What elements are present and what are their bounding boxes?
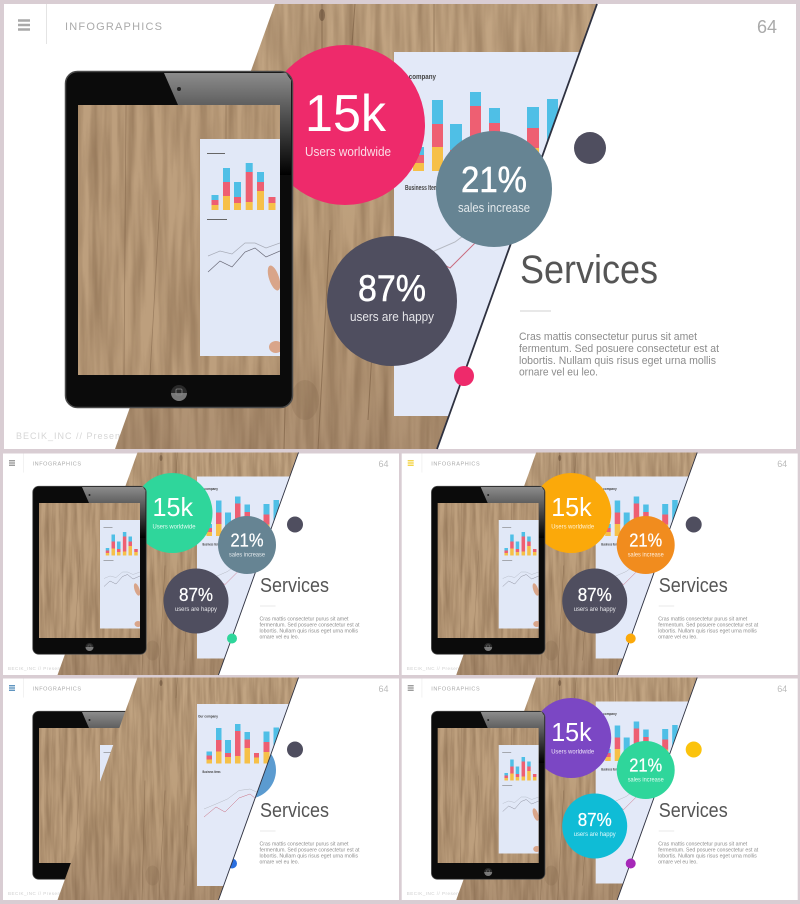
stat circle: 15k: 15k (305, 85, 387, 143)
heading: services: Services (260, 575, 329, 597)
wood photo with chart paper (100, 0, 610, 452)
body text (260, 842, 360, 865)
stat circle: 15k: Users worldwide (305, 144, 391, 159)
stat circle: 87% (327, 236, 457, 366)
body text: Cras mattis consectetur purus sit amet (260, 842, 349, 848)
heading: infographics: INFOGRAPHICS (65, 21, 162, 33)
accent dot: purple (626, 858, 636, 868)
accent dot: dark (287, 516, 303, 532)
accent dot: pink (454, 366, 474, 386)
panel: blue theme slide, wood wipe over content (3, 676, 399, 902)
heading: services: Services (659, 800, 728, 822)
body text: ornare vel eu leo. (260, 634, 299, 640)
body text: Cras mattis consectetur purus sit amet (658, 616, 748, 622)
footer credit: BECIK_INC // Presentation (8, 666, 75, 671)
stat circle: partly hidden blue (218, 741, 276, 799)
stat circle: 21%: sales increase (229, 552, 265, 558)
page number: 64 (777, 684, 787, 694)
panel: orange theme slide (402, 450, 798, 676)
wood photo with chart paper (50, 676, 305, 902)
heading: services: Services (520, 248, 658, 292)
stat circle: 21%: 21% (461, 159, 527, 200)
heading: infographics: INFOGRAPHICS (32, 686, 81, 692)
stat circle: 21% (218, 516, 276, 574)
stat circle: 15k (531, 473, 611, 553)
icon: menu (18, 20, 30, 30)
body text (658, 842, 759, 865)
stat circle: 15k: Users worldwide (551, 748, 595, 756)
stat circle: 87%: 87% (179, 584, 213, 605)
stat circle: 87%: users are happy (350, 309, 434, 324)
body text: fermentum. Sed posuere consectetur est at (658, 848, 759, 854)
stat circle: 21%: sales increase (628, 776, 664, 784)
body text: lobortis. Nullam quis risus eget urna mollis (658, 628, 757, 634)
stat circle: 87%: 87% (578, 584, 612, 605)
body text: ornare vel eu leo. (658, 859, 698, 865)
wood photo with chart paper (449, 676, 704, 902)
stat circle: 15k: 15k (551, 717, 593, 747)
icon: menu (408, 461, 414, 465)
body text: lobortis. Nullam quis risus eget urna mollis (519, 355, 716, 367)
body text: fermentum. Sed posuere consectetur est at (658, 622, 759, 628)
wood photo with chart paper (449, 450, 704, 676)
stat circle: 21%: 21% (629, 756, 662, 776)
heading: infographics: INFOGRAPHICS (431, 462, 480, 468)
body text: Cras mattis consectetur purus sit amet (260, 616, 349, 622)
body text: ornare vel eu leo. (260, 859, 299, 865)
stat circle: 87% (164, 568, 228, 634)
accent dot: amber (626, 634, 636, 644)
footer credit: BECIK_INC // Presentation (407, 666, 473, 671)
stat circle: 21%: sales increase (458, 201, 530, 215)
slanted divider line (617, 452, 697, 675)
stat circle: 87%: users are happy (574, 606, 616, 613)
icon: menu (9, 686, 15, 690)
accent dot: dark (287, 742, 303, 758)
accent dot: blue (227, 858, 237, 868)
stat circle: 15k: Users worldwide (551, 524, 595, 530)
page number: 64 (378, 459, 388, 469)
icon: tablet (431, 711, 545, 879)
body text: fermentum. Sed posuere consectetur est at (260, 848, 360, 854)
body text (260, 616, 360, 640)
body text: fermentum. Sed posuere consectetur est at (260, 622, 360, 628)
stat circle: 87%: users are happy (574, 831, 616, 838)
accent dot: green (227, 634, 237, 644)
body text: Cras mattis consectetur purus sit amet (519, 331, 697, 343)
stat circle: 87% (562, 794, 627, 858)
stat circle: 21%: 21% (230, 530, 264, 550)
stat circle: 15k: 15k (152, 492, 194, 522)
body text (658, 616, 759, 640)
accent dot: dark (574, 132, 606, 164)
stat circle: 87% (562, 568, 627, 634)
slanted divider line (218, 452, 298, 675)
icon: tablet (33, 486, 146, 654)
slanted divider line (617, 678, 697, 900)
footer credit: BECIK_INC // Presentation (407, 891, 473, 896)
slanted divider line (218, 678, 298, 900)
heading: infographics: INFOGRAPHICS (431, 686, 480, 692)
body text: lobortis. Nullam quis risus eget urna mollis (658, 854, 757, 860)
body text: Cras mattis consectetur purus sit amet (658, 842, 748, 848)
stat circle: 15k: Users worldwide (152, 524, 196, 530)
accent dot: dark (686, 516, 702, 532)
body text: ornare vel eu leo. (658, 634, 698, 640)
stat circle: 21% (617, 741, 675, 799)
stat circle: 87%: 87% (358, 268, 426, 309)
stat circle: 15k: 15k (551, 492, 593, 522)
footer credit: BECIK_INC // Presentation (16, 431, 149, 441)
body text: fermentum. Sed posuere consectetur est at (519, 343, 719, 355)
body text (519, 331, 719, 378)
icon: tablet (33, 711, 146, 879)
stat circle: 15k (531, 698, 611, 778)
stat circle: 87%: users are happy (175, 606, 218, 613)
wood photo with chart paper (50, 450, 305, 676)
icon: tablet (431, 486, 545, 654)
stat circle: 87%: 87% (578, 809, 612, 830)
stat circle: 21%: 21% (629, 530, 662, 550)
panel: main slide, pink theme (4, 0, 796, 452)
page number: 64 (757, 17, 777, 37)
slanted divider line (437, 4, 597, 449)
body text: lobortis. Nullam quis risus eget urna mollis (260, 854, 358, 860)
icon: menu (9, 461, 15, 465)
stat circle: 21%: sales increase (628, 552, 664, 558)
stat circle: 21% (617, 516, 675, 574)
footer credit: BECIK_INC // Presentation (8, 891, 75, 896)
panel: green theme slide (3, 450, 399, 676)
body text: lobortis. Nullam quis risus eget urna mollis (260, 628, 358, 634)
accent dot: yellow (686, 742, 702, 758)
page number: 64 (777, 459, 787, 469)
stat circle: 21% (436, 131, 552, 247)
stat circle: 15k (132, 473, 212, 553)
heading: services: Services (659, 575, 728, 597)
icon: menu (408, 686, 414, 690)
page number: 64 (378, 684, 388, 694)
body text: ornare vel eu leo. (519, 366, 598, 378)
stat circle: 15k (265, 45, 425, 205)
heading: infographics: INFOGRAPHICS (32, 462, 81, 468)
heading: services: Services (260, 800, 329, 822)
icon: tablet (66, 72, 292, 408)
panel: purple theme slide (402, 676, 798, 902)
